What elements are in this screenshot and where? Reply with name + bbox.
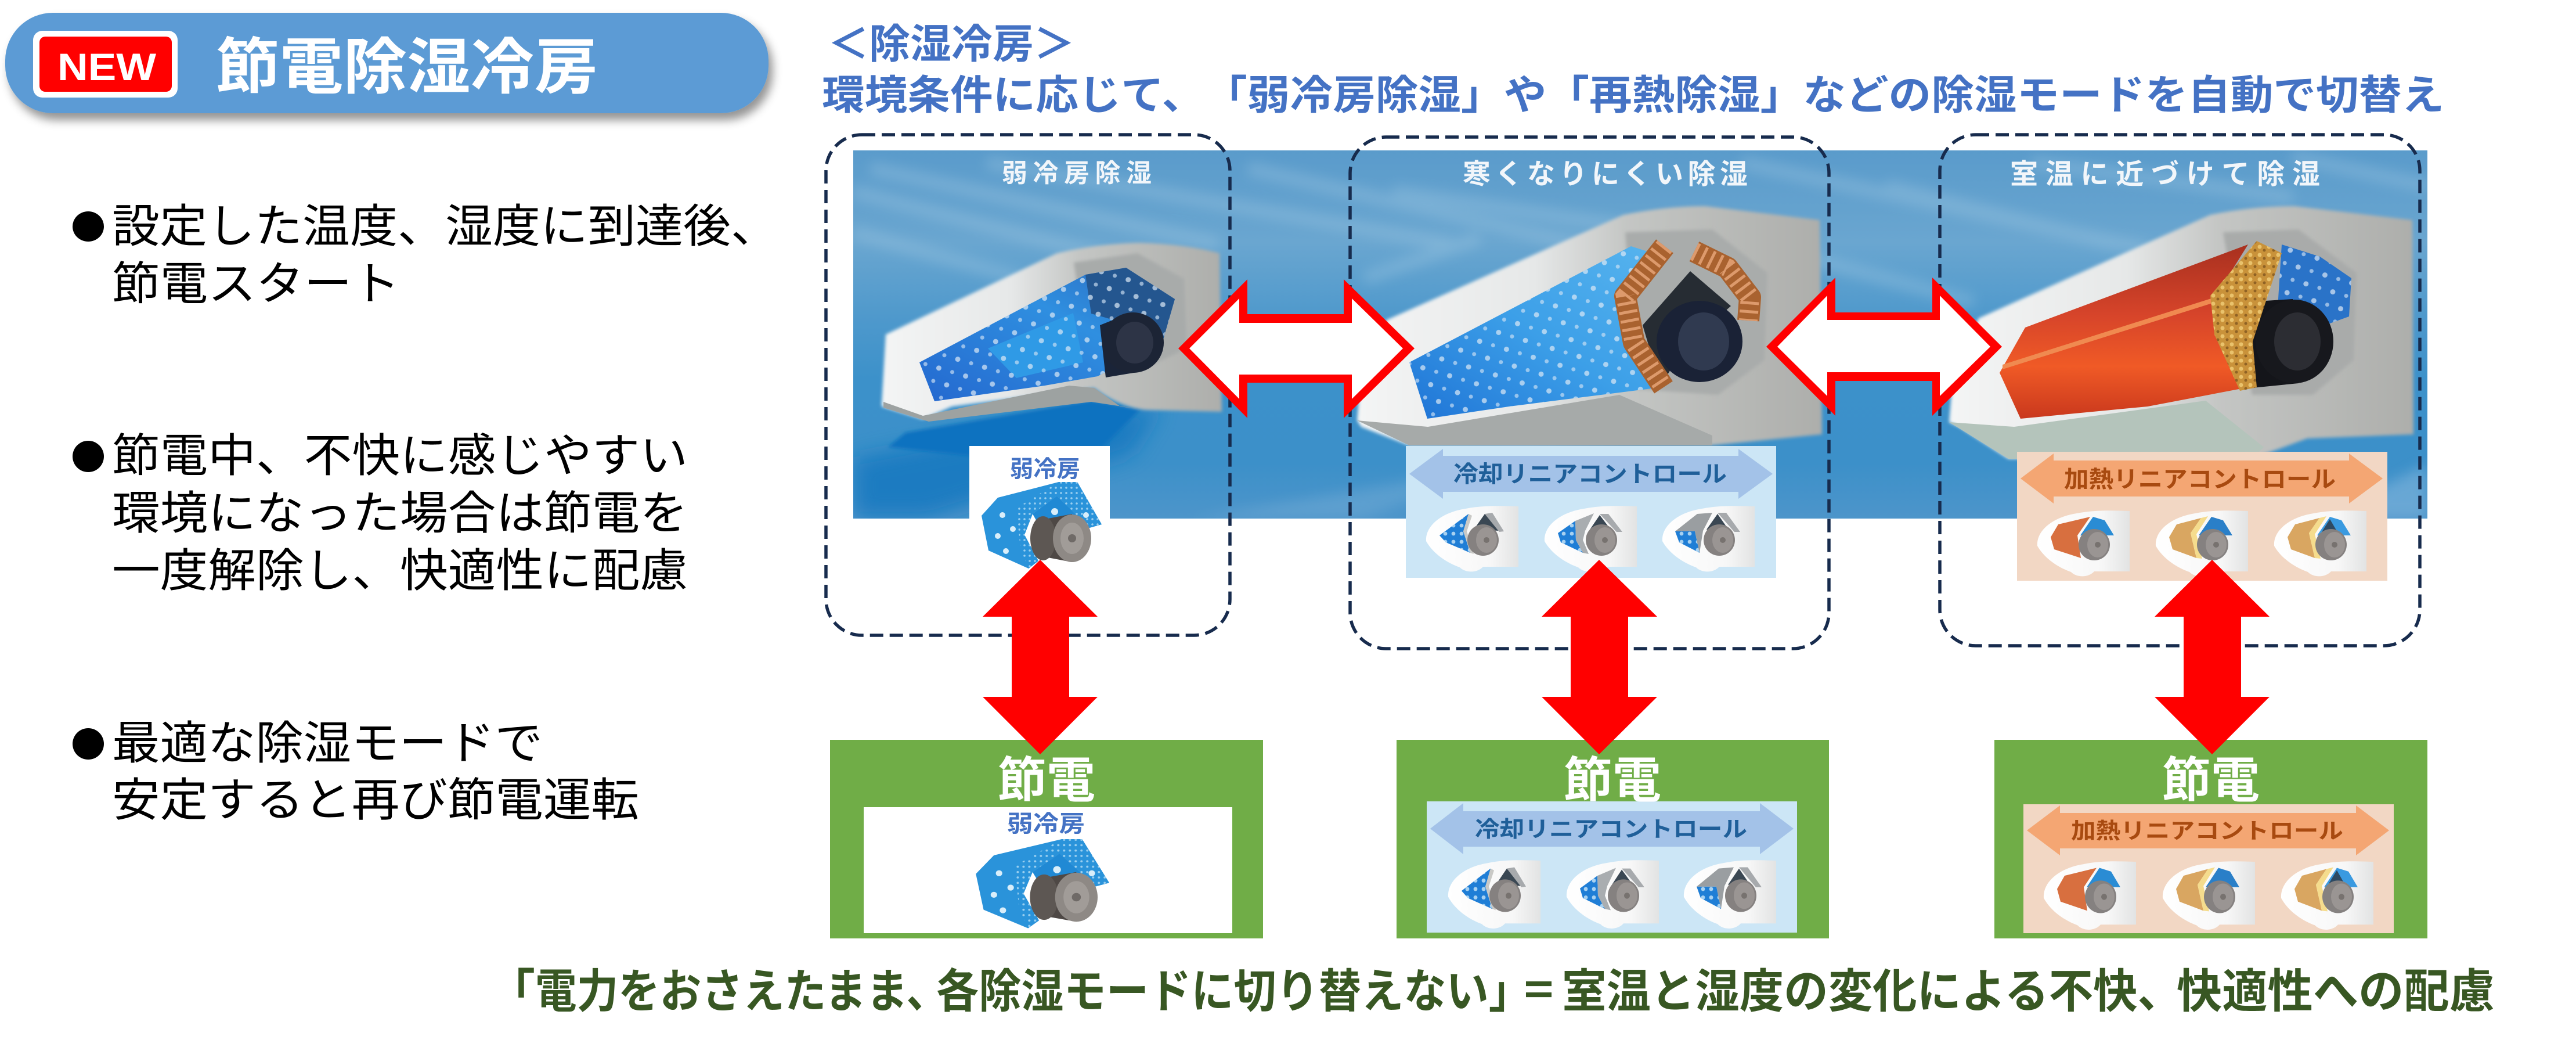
mode label: near room temp dehumidify: 室温に近づけて除湿 (2010, 159, 2320, 190)
dashed group box 3 (1940, 135, 2420, 646)
unit 2 (2163, 861, 2255, 930)
bottom statement: ＝ (1521, 966, 1557, 1017)
blue coil (919, 268, 1175, 401)
fan (1657, 301, 1742, 382)
fan (2247, 299, 2333, 388)
arrow label: 加熱リニアコントロール (2071, 819, 2343, 844)
copper tubes (1625, 246, 1750, 387)
unit 1 (2044, 861, 2136, 930)
icon: weak cooling coil (982, 482, 1102, 569)
golden fins (2210, 241, 2282, 391)
bullet 2: 一度解除し、快適性に配慮 (112, 545, 688, 596)
unit 2 (2156, 510, 2248, 576)
arrow: vertical 2 (1542, 560, 1657, 754)
bullet list (73, 200, 778, 826)
bullet 2: 環境になった場合は節電を (112, 487, 688, 539)
bottom statement: 各除湿モードに切り替えない」 (936, 966, 1531, 1017)
NEW badge (33, 31, 178, 98)
red coil (2000, 244, 2248, 419)
energy saving box 3 (1994, 740, 2427, 938)
bottom statement (489, 966, 2495, 1017)
double arrow (2027, 805, 2389, 855)
bullet 3: 最適な除湿モードで (112, 717, 543, 769)
energy saving box 1 (830, 740, 1263, 938)
double arrow (1430, 803, 1794, 854)
arrow: horizontal 2 (1766, 278, 2002, 416)
unit body (882, 243, 1222, 419)
mode label: less cold dehumidify: 寒くなりにくい除湿 (1463, 159, 1748, 190)
heading line 2: 環境条件に応じて、「弱冷房除湿」や「再熱除湿」などの除湿モードを自動で切替え (822, 73, 2444, 118)
bullet 1 (73, 200, 778, 310)
NEW badge: NEW (57, 45, 157, 88)
unit 3 (1684, 860, 1776, 929)
bullet 2 (73, 430, 688, 596)
dashed group box 1 (826, 135, 1230, 635)
air conditioner: cool linear (1357, 206, 1822, 445)
panel label: 弱冷房 (1010, 456, 1080, 482)
arrow: vertical 3 (2155, 560, 2270, 754)
fan (1100, 312, 1164, 377)
bullet 1: 節電スタート (112, 258, 400, 310)
energy saving label 2: 節電 (1564, 753, 1661, 808)
header banner (5, 13, 769, 113)
unit body (1357, 206, 1822, 445)
section heading (822, 21, 2444, 118)
bottom statement: 室温と湿度の変化による不快、 (1562, 966, 2182, 1017)
mode label: weak cooling dehumidify: 弱冷房除湿 (1002, 159, 1152, 188)
unit 3 (2274, 510, 2366, 576)
unit 2 (1545, 506, 1637, 571)
panel: weak cooling top (969, 446, 1110, 569)
unit 1 (2037, 510, 2130, 576)
inner white panel (864, 807, 1232, 933)
air conditioner: heating (1949, 206, 2413, 459)
inner peach panel (2023, 804, 2394, 933)
arrow: horizontal 1 (1178, 279, 1415, 418)
bullet 2: 節電中、不快に感じやすい (112, 430, 688, 481)
arrow label: 加熱リニアコントロール (2064, 467, 2336, 492)
icon: weak cooling coil (976, 839, 1109, 929)
banner pill (5, 13, 769, 113)
bullet 3 (73, 717, 639, 826)
banner title: 節電除湿冷房 (216, 34, 598, 102)
bullet 3: 安定すると再び節電運転 (112, 774, 639, 826)
energy saving label 1: 節電 (998, 753, 1095, 808)
bottom statement: 快適性への配慮 (2177, 966, 2495, 1017)
unit 3 (2281, 861, 2373, 930)
double arrow (1409, 449, 1773, 499)
blue coil (1409, 246, 1661, 419)
label: 弱冷房 (1007, 811, 1085, 837)
energy saving box 2 (1397, 740, 1829, 938)
unit 1 (1448, 860, 1540, 929)
dark cavity (1643, 271, 1731, 386)
unit body (1949, 206, 2413, 459)
panel: cooling linear control top (1406, 446, 1776, 578)
bottom statement: 電力をおさえたまま、 (535, 966, 948, 1017)
inner blue panel (1427, 801, 1797, 933)
background photo band (853, 150, 2427, 519)
panel: heating linear control top (2017, 452, 2387, 581)
blue coil section (2278, 244, 2351, 324)
bullet 1: 設定した温度、湿度に到達後、 (112, 200, 778, 252)
arrow label: 冷却リニアコントロール (1453, 462, 1727, 487)
energy saving label 3: 節電 (2162, 753, 2260, 808)
unit 2 (1567, 860, 1659, 929)
dashed group box 2 (1350, 137, 1829, 649)
double arrow (2021, 454, 2383, 503)
unit 3 (1662, 506, 1755, 571)
heading line 1: ＜除湿冷房＞ (828, 21, 1075, 67)
unit 1 (1426, 506, 1518, 571)
bottom statement: 「 (489, 966, 535, 1017)
arrow label: 冷却リニアコントロール (1475, 818, 1747, 842)
arrow: vertical 1 (983, 560, 1098, 754)
air conditioner: weak cooling (882, 243, 1222, 459)
airflow (888, 401, 1141, 459)
